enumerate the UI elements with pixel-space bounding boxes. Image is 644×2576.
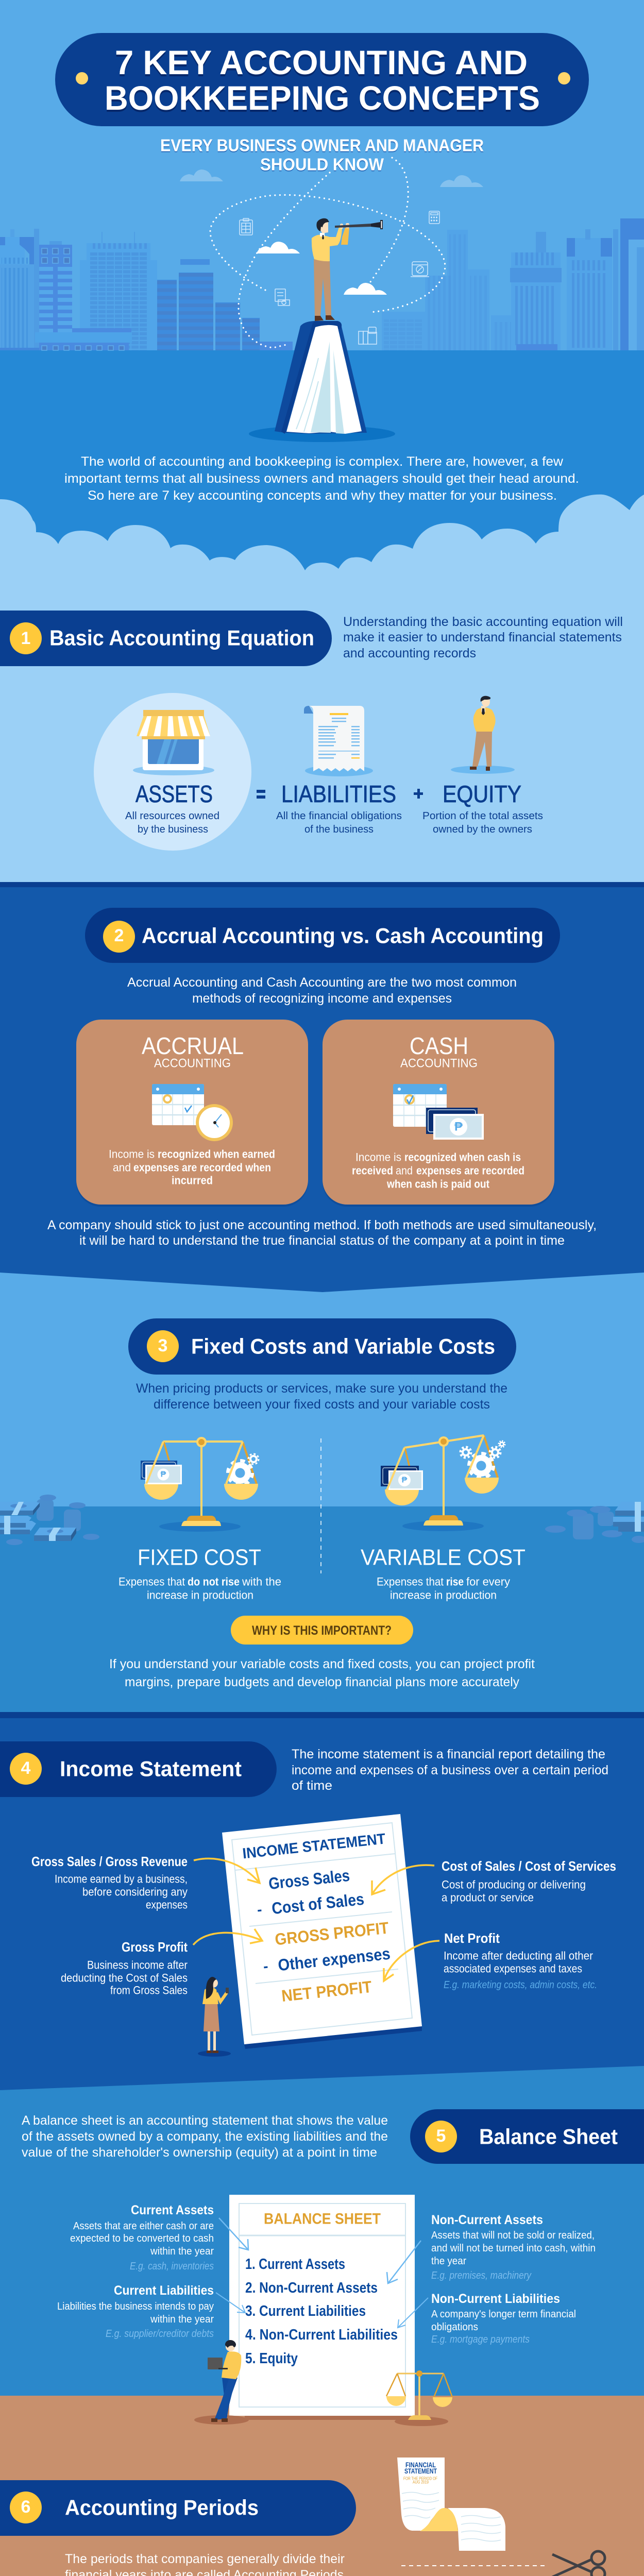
section 2 description: methods of recognizing income and expenses (192, 991, 452, 1006)
section 2 heading pill: 2 (114, 926, 124, 945)
panel: accrual accounting: incurred (172, 1174, 213, 1187)
arrow: cost of sales (372, 1865, 434, 1894)
section 6 heading pill: 6 (21, 2497, 30, 2517)
section 1 description: and accounting records (343, 646, 476, 660)
financial statement: August (397, 2458, 505, 2551)
cost of sales label: Cost of producing or delivering (442, 1878, 586, 1891)
net profit label: associated expenses and taxes (444, 1962, 582, 1975)
section 6 paragraphs (65, 2552, 365, 2576)
icon: standing man (451, 696, 515, 774)
subtitle (160, 136, 484, 174)
icon: calendar and peso bills: ₱ (454, 1120, 463, 1133)
equals sign (257, 790, 265, 799)
current liabilities label: Liabilities the business intends to pay (57, 2301, 214, 2312)
assets label (125, 781, 219, 835)
icon: calendar and clock (152, 1084, 233, 1141)
non-current assets label (431, 2213, 596, 2281)
title banner: 7 KEY ACCOUNTING AND (115, 43, 528, 81)
section 2 heading pill (85, 908, 560, 963)
arrow: non-current liabilities (398, 2298, 428, 2328)
balance sheet document: 2. Non-Current Assets (245, 2280, 378, 2296)
current assets label: within the year (150, 2246, 214, 2257)
section 5 description: of the assets owned by a company, the existing liabilities and the (22, 2129, 388, 2144)
current assets label: Current Assets (131, 2203, 214, 2217)
variable cost text: rise (446, 1575, 464, 1588)
variable cost text: Expenses that (377, 1575, 444, 1588)
skyline (0, 218, 644, 350)
financial statement: August: STATEMENT (404, 2467, 437, 2475)
money piles: right (545, 1502, 644, 1543)
equity label: owned by the owners (433, 824, 532, 835)
section 3 description: difference between your fixed costs and your variable costs (154, 1397, 490, 1412)
assets label: ASSETS (135, 781, 213, 807)
icon: storefront (133, 710, 214, 775)
assets label: by the business (138, 824, 208, 835)
liabilities label (276, 781, 402, 835)
non-current assets label: Non-Current Assets (431, 2213, 543, 2227)
assets label: All resources owned (125, 810, 219, 822)
income statement document: Cost of Sales (271, 1890, 365, 1918)
gross sales label: before considering any (82, 1886, 188, 1898)
panel: cash accounting: and (396, 1164, 413, 1177)
income statement document: Other expenses (277, 1944, 391, 1974)
net profit label: Income after deducting all other (444, 1950, 593, 1962)
section 4 description: The income statement is a financial report detailing the (292, 1747, 605, 1761)
current liabilities label: within the year (150, 2314, 214, 2325)
floating finance icons (240, 211, 439, 344)
section 5 description: value of the shareholder's ownership (equity) at a point in time (22, 2145, 377, 2160)
icon: scissors (552, 2551, 605, 2576)
income statement document: - (256, 1901, 263, 1918)
equity label (422, 781, 543, 835)
balance sheet document: 1. Current Assets (245, 2256, 345, 2273)
gross sales label: expenses (146, 1898, 188, 1911)
section 6 heading pill (0, 2480, 356, 2536)
section 4 heading pill: 4 (21, 1758, 31, 1778)
arrow: gross sales (194, 1859, 260, 1883)
non-current assets label: the year (431, 2256, 466, 2267)
panel: cash accounting: CASH (410, 1032, 468, 1059)
gross sales label: Gross Sales / Gross Revenue (31, 1854, 188, 1869)
fixed cost text: with the (242, 1575, 281, 1588)
section 4 description (292, 1747, 608, 1793)
liabilities label: All the financial obligations (276, 810, 402, 822)
section 1 heading pill: 1 (21, 629, 30, 648)
non-current liabilities label: Non-Current Liabilities (431, 2292, 560, 2306)
current assets label: expected to be converted to cash (70, 2233, 214, 2244)
fixed cost scale: ₱ (161, 1470, 166, 1479)
title banner (55, 33, 589, 126)
gross sales label: Income earned by a business, (55, 1872, 188, 1886)
fixed cost text: Expenses that (118, 1575, 185, 1588)
section 2 conclusion: it will be hard to understand the true financial status of the company at a point in time (79, 1233, 565, 1248)
non-current liabilities label (431, 2292, 576, 2345)
illustration: man with telescope on a book (249, 218, 395, 442)
panel: cash accounting (323, 1020, 554, 1207)
section 1 heading pill (0, 611, 332, 666)
money piles: left (0, 1495, 99, 1545)
panel: accrual accounting: ACCRUAL (142, 1032, 244, 1059)
current assets label: Assets that are either cash or are (73, 2221, 214, 2232)
panel: cash accounting: received (352, 1164, 393, 1177)
section 4 description: of time (292, 1778, 332, 1793)
section 5 heading pill: 5 (436, 2126, 446, 2146)
section 3 conclusion: If you understand your variable costs and fixed costs, you can project profit (109, 1657, 535, 1671)
non-current liabilities label: E.g. mortgage payments (431, 2334, 530, 2345)
fixed cost text (118, 1545, 281, 1601)
equity label: Portion of the total assets (422, 810, 543, 822)
financial statement: August: FINANCIAL (405, 2461, 436, 2469)
gross sales label (31, 1854, 188, 1911)
variable cost text: VARIABLE COST (361, 1545, 526, 1570)
dotted orbit lines (210, 158, 445, 348)
arrow: non-current assets (387, 2241, 421, 2283)
section 3 description: When pricing products or services, make sure you understand the (136, 1381, 507, 1396)
variable cost scale: ₱ (402, 1476, 408, 1485)
current assets label (70, 2203, 214, 2272)
subtitle: SHOULD KNOW (260, 155, 384, 174)
net profit label: Net Profit (444, 1930, 500, 1946)
section 3 heading pill: Fixed Costs and Variable Costs (191, 1334, 495, 1358)
gross profit label: from Gross Sales (110, 1984, 188, 1997)
gross profit label: deducting the Cost of Sales (61, 1971, 188, 1985)
liabilities label: LIABILITIES (281, 781, 396, 807)
fixed cost text: FIXED COST (138, 1545, 261, 1570)
net profit label: E.g. marketing costs, admin costs, etc. (444, 1979, 597, 1991)
cost of sales label: Cost of Sales / Cost of Services (442, 1858, 616, 1874)
variable cost text: increase in production (390, 1589, 497, 1601)
fixed cost scale (141, 1437, 259, 1532)
non-current liabilities label: A company's longer term financial (431, 2309, 576, 2320)
current liabilities label: Current Liabilities (114, 2283, 214, 2298)
panel: accrual accounting (76, 1020, 308, 1207)
icon: calendar and peso bills (393, 1084, 484, 1140)
icon: receipt (304, 706, 373, 776)
subtitle: EVERY BUSINESS OWNER AND MANAGER (160, 136, 484, 155)
panel: cash accounting: recognized when cash is (404, 1151, 521, 1163)
panel: accrual accounting: and (113, 1161, 131, 1174)
variable cost scale (381, 1435, 505, 1531)
illustration: man with laptop (194, 2340, 249, 2425)
non-current assets label: Assets that will not be sold or realized, (431, 2230, 595, 2241)
section 2 conclusion (47, 1218, 597, 1248)
current assets label: E.g. cash, inventories (130, 2261, 214, 2272)
current liabilities label (57, 2283, 214, 2340)
panel: cash accounting: ACCOUNTING (400, 1056, 478, 1071)
section 6 heading pill: Accounting Periods (65, 2496, 259, 2519)
section 4 heading pill (0, 1741, 277, 1797)
non-current assets label: and will not be turned into cash, within (431, 2243, 596, 2254)
panel: accrual accounting: Income is (109, 1148, 155, 1160)
balance sheet document (229, 2195, 415, 2420)
balance sheet document: BALANCE SHEET (264, 2210, 381, 2228)
income statement document (222, 1814, 422, 2049)
gross profit label: Gross Profit (122, 1939, 188, 1955)
arrow: net profit (384, 1941, 439, 1981)
panel: accrual accounting: ACCOUNTING (154, 1056, 231, 1071)
balance sheet document: 3. Current Liabilities (245, 2303, 366, 2319)
callout: why is this important (231, 1616, 413, 1645)
income statement document: Gross Sales (268, 1866, 350, 1893)
variable cost text (361, 1545, 526, 1601)
financial statement: August: AUG 2019 (413, 2480, 429, 2484)
cost of sales label: a product or service (442, 1891, 534, 1904)
variable cost text: for every (466, 1575, 510, 1588)
arrow: gross profit (193, 1929, 262, 1945)
balance sheet document: 5. Equity (245, 2350, 298, 2367)
section 1 heading pill: Basic Accounting Equation (49, 625, 314, 650)
current liabilities label: E.g. supplier/creditor debts (106, 2328, 214, 2340)
intro paragraph: The world of accounting and bookkeeping is complex. There are, however, a few (81, 454, 564, 469)
section 5 heading pill (410, 2109, 644, 2164)
balance sheet document: 4. Non-Current Liabilities (245, 2327, 398, 2343)
section 3 conclusion: margins, prepare budgets and develop financial plans more accurately (125, 1675, 519, 1689)
section 3 conclusion (109, 1657, 535, 1689)
income statement document: INCOME STATEMENT (242, 1831, 386, 1862)
equity label: EQUITY (443, 781, 521, 807)
section 1 description: make it easier to understand financial statements (343, 630, 622, 645)
section 1 description: Understanding the basic accounting equation will (343, 615, 623, 629)
intro paragraph: So here are 7 key accounting concepts and why they matter for your business. (88, 488, 557, 503)
section 5 description (22, 2113, 388, 2160)
cost of sales label (442, 1858, 616, 1904)
section 3 heading pill: 3 (158, 1336, 167, 1355)
section 5 heading pill: Balance Sheet (479, 2125, 618, 2148)
net profit label (444, 1930, 597, 1991)
title banner: BOOKKEEPING CONCEPTS (105, 79, 540, 117)
gross profit label: Business income after (87, 1959, 188, 1971)
liabilities label: of the business (304, 824, 374, 835)
cut line (401, 2565, 548, 2566)
callout: why is this important: WHY IS THIS IMPORTANT? (252, 1623, 392, 1638)
income statement document: - (262, 1958, 269, 1974)
panel: cash accounting: Income is (355, 1151, 401, 1163)
fixed cost text: increase in production (147, 1589, 253, 1601)
illustration: small scale (386, 2370, 452, 2426)
arrow: current liabilities (216, 2293, 245, 2313)
divider (320, 1438, 321, 1573)
intro paragraph: important terms that all business owners and managers should get their head around. (64, 471, 579, 486)
income statement document: GROSS PROFIT (274, 1918, 390, 1949)
fixed cost text: do not rise (188, 1575, 240, 1588)
non-current liabilities label: obligations (431, 2321, 478, 2333)
panel: accrual accounting: recognized when earned (158, 1148, 275, 1160)
illustration: woman with phone (198, 1977, 231, 2057)
section 4 description: income and expenses of a business over a certain period (292, 1763, 608, 1777)
panel: cash accounting: expenses are recorded (416, 1164, 524, 1177)
assets circle (94, 693, 251, 851)
section 2 description: Accrual Accounting and Cash Accounting are the two most common (127, 975, 517, 990)
clouds (180, 170, 483, 295)
gross profit label (61, 1939, 188, 1997)
non-current assets label: E.g. premises, machinery (431, 2270, 532, 2281)
section 3 heading pill (128, 1318, 516, 1375)
section 6 paragraphs: The periods that companies generally divide their (65, 2552, 345, 2566)
panel: accrual accounting: expenses are recorded when (133, 1161, 271, 1174)
financial statement: August: FOR THE PERIOD OF (403, 2476, 437, 2481)
plus sign (414, 789, 423, 799)
income statement document: NET PROFIT (281, 1977, 373, 2005)
section 3 description (136, 1381, 507, 1412)
panel: cash accounting: when cash is paid out (386, 1178, 490, 1190)
section 1 description (343, 615, 623, 660)
section 2 heading pill: Accrual Accounting vs. Cash Accounting (142, 923, 544, 948)
section 5 description: A balance sheet is an accounting statement that shows the value (22, 2113, 388, 2128)
arrow: current assets (219, 2218, 248, 2250)
section 2 description (127, 975, 517, 1006)
section 2 conclusion: A company should stick to just one accounting method. If both methods are used simultaneously, (47, 1218, 597, 1232)
intro paragraph (64, 454, 579, 503)
section 4 heading pill: Income Statement (60, 1757, 242, 1781)
